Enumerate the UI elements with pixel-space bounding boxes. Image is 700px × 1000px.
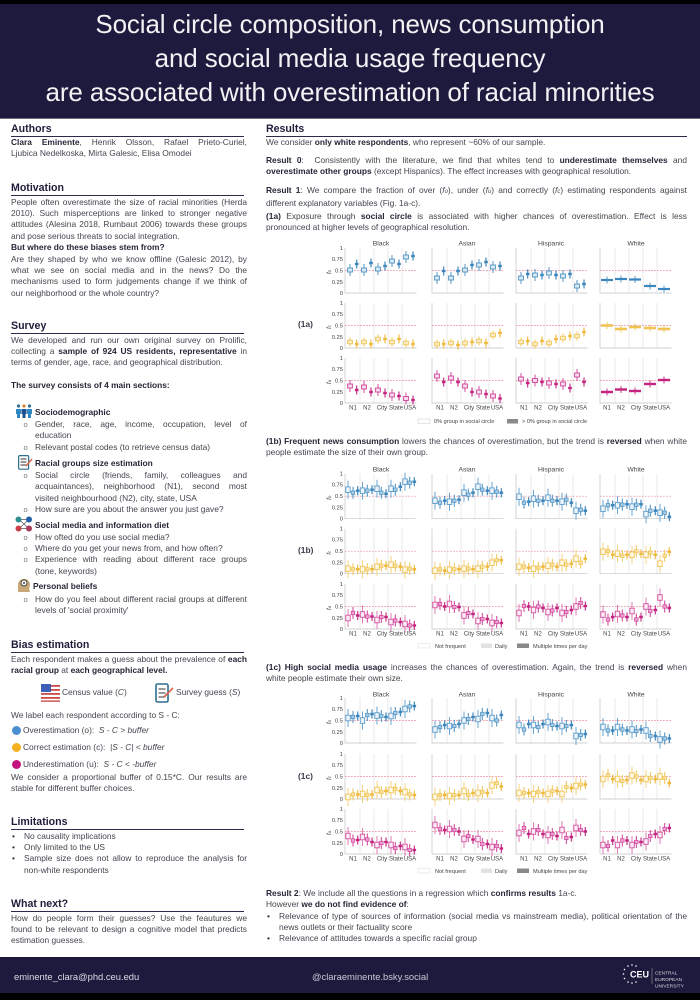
text: result 0: Result 0: Consistently with the literature, we find that whites tend to underestimate themselves and — [266, 155, 687, 165]
title: and social media usage frequency — [155, 43, 545, 73]
list: limitations: non-white respondents — [24, 865, 109, 875]
row: under-estimation 1c: 1 — [340, 807, 343, 813]
text: survey sections intro: The survey consists of 4 main sections: — [11, 380, 170, 390]
row: correct estimation 1c: 0.5 — [335, 774, 343, 780]
row: under-estimation 1c: N2 — [363, 856, 371, 862]
text: • — [267, 933, 270, 943]
row: under-estimation 1a: N2 — [363, 406, 371, 412]
text: motivation: Are they shaped by who we know offline (Galesic 2012), by — [11, 254, 247, 264]
row: under-estimation 1c: City — [548, 856, 558, 862]
text: • — [12, 842, 15, 852]
column titles 1b: White — [627, 466, 645, 474]
row: under-estimation 1b: N1 — [520, 632, 528, 638]
footer: email: eminente_clara@phd.ceu.edu — [14, 971, 139, 982]
row: under-estimation 1a: N1 — [349, 406, 357, 412]
text: what next: How do people form their guesses? Use the feautures we — [11, 912, 247, 922]
row: under-estimation 1a: City — [464, 406, 474, 412]
row: under-estimation 1a: N1 — [436, 406, 444, 412]
icon: people — [16, 404, 32, 418]
legend 1c — [418, 868, 588, 875]
row: correct estimation 1a: 1 — [340, 301, 343, 307]
legend 1b — [418, 644, 588, 650]
text: result 0: overestimate other groups (except Hispanics). The effect increases with geographical resolution. — [266, 166, 631, 176]
row: under-estimation 1c: City — [631, 856, 641, 862]
row: under-estimation 1b: State — [643, 632, 658, 638]
row: under-estimation 1c: City — [464, 856, 474, 862]
row: correct estimation 1a: 0.25 — [332, 335, 343, 341]
text: authors: Clara Eminente, Henrik Olsson, Rafael Prieto-Curiel, — [11, 137, 247, 147]
row: under-estimation 1b: City — [377, 632, 387, 638]
row label 1a: (1a) — [298, 319, 313, 329]
legend 1c: Multiple times per day — [533, 869, 588, 875]
text: finding 1b — [266, 436, 687, 457]
legend 1b: Multiple times per day — [533, 644, 588, 650]
text: motivation: what we see on social media and in the news? Do the — [11, 265, 247, 275]
row: under-estimation 1a: 0.75 — [332, 367, 343, 373]
row: under-estimation 1b: N2 — [450, 632, 458, 638]
heading: Limitations: Limitations — [11, 816, 68, 828]
text: result 0 — [266, 155, 687, 176]
row: under-estimation 1a: State — [389, 406, 404, 412]
text: motivation: People often overestimate the size of racial minorities (Herda — [11, 196, 247, 206]
text: what next: estimation guesses. — [11, 935, 85, 945]
row: correct estimation 1a: 0 — [340, 346, 343, 352]
row: over-estimation 1b: 0.25 — [332, 506, 343, 512]
row: under-estimation 1b: N2 — [617, 632, 625, 638]
title — [46, 9, 654, 107]
row: under-estimation 1b: USA — [658, 632, 670, 638]
row: correct estimation 1c: 0.25 — [332, 786, 343, 792]
row: over-estimation 1b: 0.75 — [332, 483, 343, 489]
logo: CEU: EUROPEAN — [655, 977, 682, 983]
list: racial groups items: acquaintances), neighborhood (N1), second most — [35, 481, 247, 491]
legend 1a: 0% group in social circle — [434, 419, 494, 425]
text: what next: found to be relevant to design a cognitive model that predicts — [11, 924, 247, 934]
text: o — [24, 505, 28, 514]
row: under-estimation 1b: USA — [575, 632, 587, 638]
row: under-estimation 1b: USA — [491, 632, 503, 638]
logo: CEU: CENTRAL — [655, 970, 678, 976]
row: under-estimation 1a: USA — [404, 406, 416, 412]
column titles 1a: Asian — [458, 240, 476, 248]
row: under-estimation 1a: USA — [491, 406, 503, 412]
row: under-estimation 1b: fu — [326, 605, 333, 610]
text: survey intro — [11, 334, 247, 367]
legend 1a: > 0% group in social circle — [522, 419, 587, 425]
text: finding 1a — [266, 211, 687, 232]
heading: Bias estimation: Bias estimation — [11, 639, 89, 651]
list: social media items: Experience with reading about different race groups — [35, 554, 247, 564]
logo: CEU: CEU — [630, 970, 649, 980]
list: limitations — [12, 830, 247, 875]
heading: What next?: What next? — [11, 898, 68, 910]
row: under-estimation 1b — [326, 582, 672, 638]
row: under-estimation 1a: City — [548, 406, 558, 412]
row: under-estimation 1c: N1 — [436, 856, 444, 862]
row: under-estimation 1c: N2 — [534, 856, 542, 862]
row: correct estimation 1a: fc — [326, 324, 333, 329]
text: bias intro: Each respondent makes a guess about the prevalence of each — [11, 654, 247, 664]
legend 1a — [418, 419, 587, 425]
text: authors: Ljubica Nedelkoska, Mirta Galesic, Elisa Omodei — [11, 148, 192, 158]
chart 1b — [298, 466, 672, 650]
row: under-estimation 1a: N2 — [534, 406, 542, 412]
row: under-estimation 1a: 0.25 — [332, 390, 343, 396]
legend: underestimation: Underestimation (u): S - C < -buffer — [23, 758, 156, 768]
row: over-estimation 1c: 0 — [340, 741, 343, 747]
row: correct estimation 1a — [326, 301, 672, 352]
row: correct estimation 1c: 0.75 — [332, 763, 343, 769]
row: correct estimation 1c: fc — [326, 775, 333, 780]
legend: correct estimation: Correct estimation (c): |S - C| < buffer — [23, 742, 164, 752]
subheading: Racial groups size estimation: Racial groups size estimation — [35, 458, 153, 468]
list: social media items: Where do you get your news from, and how often? — [35, 543, 223, 553]
row: correct estimation 1b: 0.5 — [335, 549, 343, 555]
row: under-estimation 1a: 0 — [340, 401, 343, 407]
text: • — [12, 830, 15, 840]
row: under-estimation 1b: N2 — [363, 632, 371, 638]
column titles 1b: Black — [373, 466, 390, 474]
list: limitations: No causality implications — [24, 830, 116, 840]
logo: CEU — [622, 964, 685, 990]
row label 1b: (1b) — [298, 545, 314, 555]
heading: Results: Results — [266, 123, 304, 135]
column titles 1c — [373, 692, 645, 698]
row: under-estimation 1c: State — [560, 856, 575, 862]
row: under-estimation 1b: 0.25 — [332, 616, 343, 622]
footer band — [0, 957, 700, 1000]
text: result 2: Result 2: We include all the questions in a regression which confirms results 1a-c. — [266, 888, 577, 898]
column titles 1a — [373, 240, 645, 248]
row: under-estimation 1b: N1 — [603, 632, 611, 638]
legend 1c: Daily — [495, 869, 508, 875]
list: social media items: How ofted do you use social media? — [35, 532, 170, 542]
row: over-estimation 1b: 0.5 — [335, 494, 343, 500]
heading: Motivation — [11, 182, 244, 196]
text: motivation: attitudes (Alesina 2018, Rumbaut 2006) towards these groups — [11, 219, 247, 229]
list: social media items — [24, 532, 247, 576]
footer: bluesky handle: @claraeminente.bsky.social — [312, 971, 428, 982]
subheading: Social media and information diet: Social media and information diet — [35, 520, 169, 530]
row: under-estimation 1a: USA — [575, 406, 587, 412]
row: under-estimation 1c: State — [643, 856, 658, 862]
heading: Survey: Survey — [11, 320, 46, 332]
row: over-estimation 1c: 0.25 — [332, 730, 343, 736]
row: under-estimation 1a: 0.5 — [335, 378, 343, 384]
icon: survey guess — [155, 683, 174, 703]
row: over-estimation 1a: 0.25 — [332, 280, 343, 286]
text: o — [24, 532, 28, 542]
text: motivation: 2010). Such misperceptions are linked to stronger negative — [11, 208, 247, 218]
text: motivation — [11, 196, 248, 298]
row: under-estimation 1b: State — [476, 632, 491, 638]
row: correct estimation 1c: 0 — [340, 797, 343, 803]
text: o — [24, 420, 28, 429]
row: over-estimation 1c: 0.75 — [332, 707, 343, 713]
row: under-estimation 1a: City — [631, 406, 641, 412]
row: over-estimation 1a: fo — [326, 269, 333, 274]
text: finding 1a: pronounced at higher levels of geographical resolution. — [266, 222, 469, 232]
column titles 1c: Black — [373, 692, 390, 698]
text: o — [24, 471, 28, 480]
row: correct estimation 1b: 0.25 — [332, 561, 343, 567]
row label 1c: (1c) — [298, 771, 313, 781]
text: bias intro: racial group at each geographical level. — [11, 665, 167, 675]
row: under-estimation 1a: 1 — [340, 356, 343, 362]
list: racial groups items — [24, 470, 247, 514]
title: are associated with overestimation of racial minorities — [46, 77, 654, 107]
list: limitations: Only limited to the US — [24, 842, 105, 852]
heading: Limitations — [11, 816, 244, 830]
row: under-estimation 1c: N1 — [520, 856, 528, 862]
list: result 2 items — [267, 910, 687, 943]
row: correct estimation 1c: 1 — [340, 752, 343, 758]
text: finding 1c: white people estimate their own size. — [266, 673, 403, 683]
row: under-estimation 1c: 0 — [340, 852, 343, 858]
text: authors — [11, 137, 247, 158]
text: what next — [11, 912, 247, 945]
row: under-estimation 1b: City — [464, 632, 474, 638]
row: correct estimation 1b: 0.75 — [332, 538, 343, 544]
text: motivation: mechanisms used to form judgements change if we think of — [11, 276, 247, 286]
column titles 1a: Hispanic — [538, 240, 565, 248]
row: under-estimation 1c: USA — [575, 856, 587, 862]
row: under-estimation 1b: N1 — [436, 632, 444, 638]
list: sociodemographic items — [24, 419, 247, 452]
heading: Survey — [11, 320, 244, 334]
text: motivation: and pose serious threats to social integration. — [11, 231, 180, 241]
row: under-estimation 1c — [326, 807, 672, 862]
row: under-estimation 1c: N1 — [603, 856, 611, 862]
row: over-estimation 1c: 0.5 — [335, 718, 343, 724]
text: bias intro — [11, 654, 247, 675]
row: under-estimation 1c: USA — [658, 856, 670, 862]
row: under-estimation 1b: State — [560, 632, 575, 638]
text: o — [24, 443, 28, 452]
row: under-estimation 1c: 0.75 — [332, 818, 343, 824]
column titles 1c: Asian — [458, 692, 476, 698]
list: limitations: Sample size does not allow to reproduce the analysis for — [24, 853, 247, 863]
text: labelling rule: We label each respondent according to S - C: — [11, 710, 180, 720]
row: under-estimation 1b: City — [548, 632, 558, 638]
list: sociodemographic items: Gender, race, age, income, occupation, level of — [35, 419, 247, 429]
legend 1c: Not frequent — [435, 869, 466, 875]
row: under-estimation 1a: City — [377, 406, 387, 412]
text: survey intro: terms of gender, age, race, and geographical distribution. — [11, 357, 223, 367]
text: finding 1c: (1c) High social media usage increases the chances of overestimation. Again, the trend is reversed when — [266, 662, 687, 672]
column titles 1a: Black — [373, 240, 390, 248]
row: over-estimation 1a — [326, 246, 672, 297]
column titles 1c: Hispanic — [538, 692, 565, 698]
row: under-estimation 1a: N1 — [603, 406, 611, 412]
column titles 1a: White — [627, 240, 645, 248]
text: survey intro: collecting a sample of 924 US residents, representative in — [11, 346, 247, 356]
row: under-estimation 1c: State — [389, 856, 404, 862]
text: buffer note: We consider a proportional buffer of 0.15*C. Our results are — [11, 772, 247, 782]
row: over-estimation 1c: 1 — [340, 696, 343, 702]
row: under-estimation 1c: State — [476, 856, 491, 862]
row: over-estimation 1a: 0.5 — [335, 268, 343, 274]
row: under-estimation 1b: N1 — [349, 632, 357, 638]
row: under-estimation 1c: USA — [491, 856, 503, 862]
text: finding 1c — [266, 662, 687, 683]
row: correct estimation 1b: 1 — [340, 527, 343, 533]
heading: What next? — [11, 898, 244, 912]
list: sociodemographic items: education — [35, 430, 71, 440]
row: over-estimation 1a: 0.75 — [332, 257, 343, 263]
text: finding 1b: people estimate the size of their own group. — [266, 447, 428, 457]
text: sample note: We consider only white respondents, who represent ~60% of our sample. — [266, 137, 545, 147]
row: correct estimation 1b — [326, 527, 672, 578]
row: under-estimation 1a: State — [643, 406, 658, 412]
subheading: Personal beliefs: Personal beliefs — [33, 580, 97, 590]
list: racial groups items: Social circle (friends, family, colleagues and — [35, 470, 247, 480]
column titles 1b: Hispanic — [538, 466, 565, 474]
row: under-estimation 1c: fu — [326, 830, 333, 835]
row: correct estimation 1a: 0.5 — [335, 324, 343, 330]
text: buffer note — [11, 772, 247, 793]
row: over-estimation 1b: 0 — [340, 517, 343, 523]
row: correct estimation 1b: fc — [326, 550, 333, 555]
row: over-estimation 1a: 1 — [340, 246, 343, 252]
row: over-estimation 1b: fo — [326, 495, 333, 500]
icon: network — [16, 516, 32, 532]
text: motivation: But where do these biases stem from? — [11, 242, 165, 252]
header band — [0, 0, 700, 119]
row: under-estimation 1b: City — [631, 632, 641, 638]
row: over-estimation 1c: fo — [326, 719, 333, 724]
text: o — [24, 544, 28, 553]
row: under-estimation 1b: State — [389, 632, 404, 638]
row: under-estimation 1b: 0 — [340, 627, 343, 633]
row: over-estimation 1b: 1 — [340, 472, 343, 478]
text: result 2 — [266, 888, 577, 909]
text: • — [12, 853, 15, 863]
row: correct estimation 1b: 0 — [340, 572, 343, 578]
list: result 2 items: Relevance of type of sources of information (social media vs mainstream media), political orientation of the — [279, 910, 687, 920]
row: over-estimation 1a: 0 — [340, 291, 343, 297]
chart 1c — [298, 692, 672, 875]
text: result 1: Result 1: We compare the fraction of over (fo), under (fu) and correctly (fc) estimating respondents against — [266, 185, 687, 195]
row: under-estimation 1a: fu — [326, 379, 333, 384]
row: under-estimation 1c: City — [377, 856, 387, 862]
icon: checklist — [18, 455, 32, 470]
chart 1a — [298, 240, 672, 425]
list: sociodemographic items: Relevant postal codes (to retrieve census data) — [35, 442, 210, 452]
row: under-estimation 1c: 0.5 — [335, 830, 343, 836]
text: result 2: However we do not find evidence of: — [266, 899, 409, 909]
row: under-estimation 1b: 0.5 — [335, 604, 343, 610]
heading: Motivation: Motivation — [11, 182, 64, 194]
label: Survey guess: Survey guess (S) — [176, 687, 240, 697]
row: under-estimation 1a: State — [476, 406, 491, 412]
text: result 1 — [266, 185, 687, 208]
list: result 2 items: Relevance of attitudes towards a specific racial group — [279, 933, 477, 943]
column titles 1c: White — [627, 692, 645, 698]
logo: CEU: UNIVERSITY — [655, 984, 685, 990]
row: under-estimation 1b: 0.75 — [332, 593, 343, 599]
legend 1b: Not frequent — [435, 644, 466, 650]
row: correct estimation 1a: 0.75 — [332, 312, 343, 318]
row: under-estimation 1a — [326, 356, 672, 412]
row: under-estimation 1c: N1 — [349, 856, 357, 862]
row: under-estimation 1a: N1 — [520, 406, 528, 412]
heading: Authors — [11, 123, 244, 137]
text: o — [24, 555, 28, 564]
legend 1b: Daily — [495, 644, 508, 650]
text: buffer note: stable for different buffer choices. — [11, 783, 135, 793]
text: result 1: different explanatory variables (Fig. 1a-c). — [266, 198, 420, 208]
row: under-estimation 1b: 1 — [340, 582, 343, 588]
list: racial groups items: How sure are you about the answer you just gave? — [35, 504, 224, 514]
heading: Authors: Authors — [11, 123, 52, 135]
row: under-estimation 1a: State — [560, 406, 575, 412]
row: under-estimation 1a: N2 — [450, 406, 458, 412]
row: under-estimation 1c: N2 — [617, 856, 625, 862]
text: o — [24, 594, 28, 604]
subheading: Sociodemographic: Sociodemographic — [35, 406, 110, 416]
column titles 1b: Asian — [458, 466, 476, 474]
row: under-estimation 1a: USA — [658, 406, 670, 412]
text: survey intro: We developed and run our own original survey on Prolific, — [11, 334, 247, 344]
icon: head with gear — [18, 578, 30, 592]
label: Census value: Census value (C) — [62, 687, 127, 697]
icon: US flag — [41, 684, 60, 702]
row: over-estimation 1b — [326, 472, 672, 523]
row: under-estimation 1b: USA — [404, 632, 416, 638]
row: under-estimation 1c: N2 — [450, 856, 458, 862]
text: finding 1a: (1a) Exposure through social circle is associated with higher chances of overestimation. Effect is less — [266, 211, 687, 221]
list: personal beliefs items — [24, 594, 247, 615]
row: over-estimation 1c — [326, 696, 672, 747]
row: under-estimation 1b: N2 — [534, 632, 542, 638]
text: finding 1b: (1b) Frequent news consumption lowers the chances of overestimation, but the trend is reversed when white — [266, 436, 687, 446]
text: • — [267, 910, 270, 920]
list: personal beliefs items: How do you feel about different racial groups at different — [35, 594, 247, 604]
list: personal beliefs items: levels of 'social proximity' — [35, 605, 128, 615]
list: racial groups items: visited neighbourhood (N2), city, state, USA — [35, 493, 197, 503]
legend: overestimation: Overestimation (o): S - C > buffer — [23, 724, 149, 734]
row: under-estimation 1c: 0.25 — [332, 841, 343, 847]
row: under-estimation 1c: USA — [404, 856, 416, 862]
list: social media items: (tone, keywords) — [35, 566, 97, 576]
heading: Bias estimation — [11, 639, 244, 653]
row: correct estimation 1c — [326, 752, 672, 803]
row: under-estimation 1a: N2 — [617, 406, 625, 412]
list: result 2 items: news outlets or their factuality score — [279, 922, 412, 932]
text: motivation: our neighborhood or the whole country? — [11, 288, 159, 298]
heading: Results — [266, 123, 687, 137]
title: Social circle composition, news consumption — [95, 9, 605, 39]
column titles 1b — [373, 466, 645, 474]
